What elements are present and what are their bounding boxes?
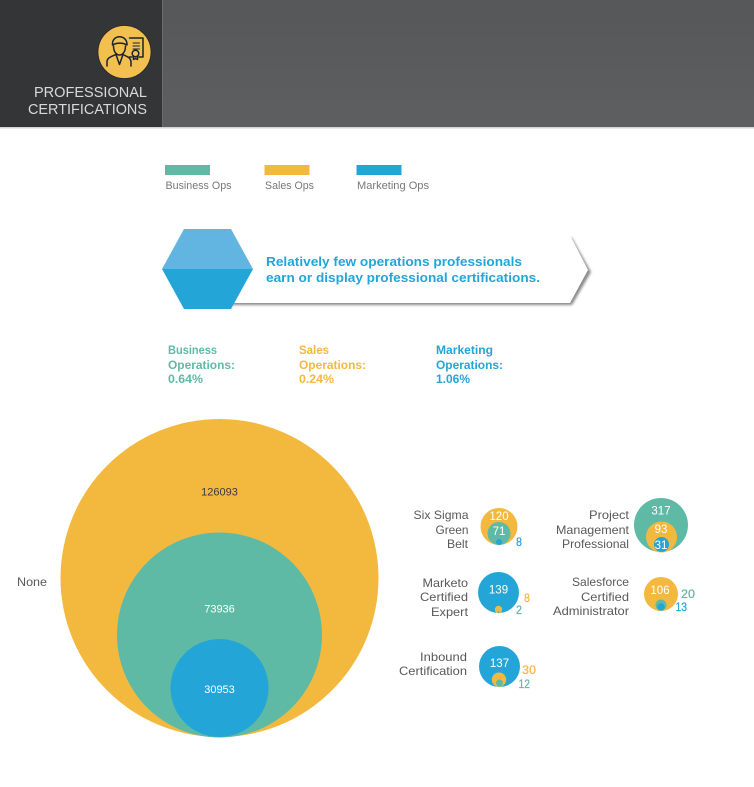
label: None: None: [17, 575, 47, 589]
stat: Sales Operations 0.24%: Operations:: [299, 360, 366, 372]
chart: Six Sigma Green Belt: Six Sigma: [414, 508, 469, 522]
stat: Marketing Operations 1.06%: 1.06%: [436, 374, 470, 386]
chart: Salesforce Certified Administrator: 106: [650, 585, 670, 597]
icon: professional with certificate: [98, 26, 151, 78]
callout text: [266, 254, 540, 285]
chart: Project Management Professional: [556, 498, 688, 552]
callout banner: [162, 229, 591, 309]
legend item: Marketing Ops: [356, 165, 429, 192]
legend item: Sales Ops: Sales Ops: [265, 180, 314, 192]
chart: Inbound Certification: 12: [518, 677, 530, 691]
chart: Salesforce Certified Administrator: Salesforce: [572, 575, 629, 589]
header band: [0, 0, 754, 128]
chart: Inbound Certification: Certification: [399, 664, 467, 678]
stat: Business Operations 0.64%: 0.64%: [168, 374, 203, 386]
chart: Six Sigma Green Belt: 8: [516, 535, 522, 549]
legend item: Business Ops: [165, 165, 232, 192]
legend item: Business Ops: Business Ops: [166, 180, 232, 192]
chart: Salesforce Certified Administrator: Certified: [581, 590, 629, 604]
chart: Marketo Certified Expert: 8: [524, 591, 530, 605]
chart: Six Sigma Green Belt: 71: [493, 526, 505, 538]
callout text: earn or display professional certifications.: [266, 270, 540, 285]
chart: Six Sigma Green Belt: [414, 508, 522, 551]
stat: Sales Operations 0.24%: 0.24%: [299, 374, 334, 386]
chart: Six Sigma Green Belt: 120: [489, 511, 509, 523]
stat: Business Operations 0.64%: Business: [168, 345, 217, 357]
chart: Marketo Certified Expert: 139: [489, 584, 508, 596]
chart: None nested circles: 73936: [204, 604, 235, 616]
legend item: Sales Ops: [264, 165, 314, 192]
stat: Business Operations 0.64%: Operations:: [168, 360, 235, 372]
stat: Marketing Operations 1.06%: [436, 345, 503, 386]
stat: Sales Operations 0.24%: [299, 345, 366, 386]
chart: Project Management Professional: 317: [651, 506, 671, 518]
chart: Project Management Professional: 31: [655, 540, 667, 552]
chart: None nested circles: 126093: [201, 486, 238, 498]
title: Professional Certifications: CERTIFICATIONS: [28, 101, 147, 118]
chart: Project Management Professional: Management: [556, 523, 630, 537]
chart: Inbound Certification: 137: [490, 658, 509, 670]
chart: Six Sigma Green Belt: Green: [436, 523, 468, 537]
title: Professional Certifications: PROFESSIONAL: [34, 84, 147, 101]
icon: hexagon: [162, 229, 253, 309]
chart: Marketo Certified Expert: 2: [516, 603, 522, 617]
stat: Marketing Operations 1.06%: Operations:: [436, 360, 503, 372]
chart: None nested circles: 30953: [204, 684, 235, 696]
legend item: Marketing Ops: Marketing Ops: [357, 180, 429, 192]
chart: Six Sigma Green Belt: Belt: [447, 537, 469, 551]
title: Professional Certifications: [28, 84, 147, 118]
chart: Marketo Certified Expert: Certified: [420, 590, 468, 604]
stat: Marketing Operations 1.06%: Marketing: [436, 345, 493, 357]
chart: Project Management Professional: 93: [655, 524, 667, 536]
legend: [165, 165, 429, 192]
chart: None nested circles: [60, 419, 378, 738]
chart: Salesforce Certified Administrator: [553, 575, 695, 618]
stat: Sales Operations 0.24%: Sales: [299, 345, 329, 357]
stat: Business Operations 0.64%: [168, 345, 235, 386]
chart: Inbound Certification: Inbound: [420, 650, 467, 664]
chart: Salesforce Certified Administrator: 20: [681, 587, 695, 601]
chart: Marketo Certified Expert: [420, 572, 530, 619]
chart: Inbound Certification: 30: [522, 663, 536, 677]
chart: Salesforce Certified Administrator: 13: [676, 600, 687, 614]
chart: Salesforce Certified Administrator: Administrator: [553, 604, 629, 618]
chart: Project Management Professional: Project: [589, 508, 630, 522]
chart: Project Management Professional: Professional: [562, 537, 629, 551]
chart: Marketo Certified Expert: Expert: [431, 605, 469, 619]
callout text: Relatively few operations professionals: [266, 254, 522, 269]
chart: Inbound Certification: [399, 646, 536, 691]
chart: Marketo Certified Expert: Marketo: [422, 576, 468, 590]
